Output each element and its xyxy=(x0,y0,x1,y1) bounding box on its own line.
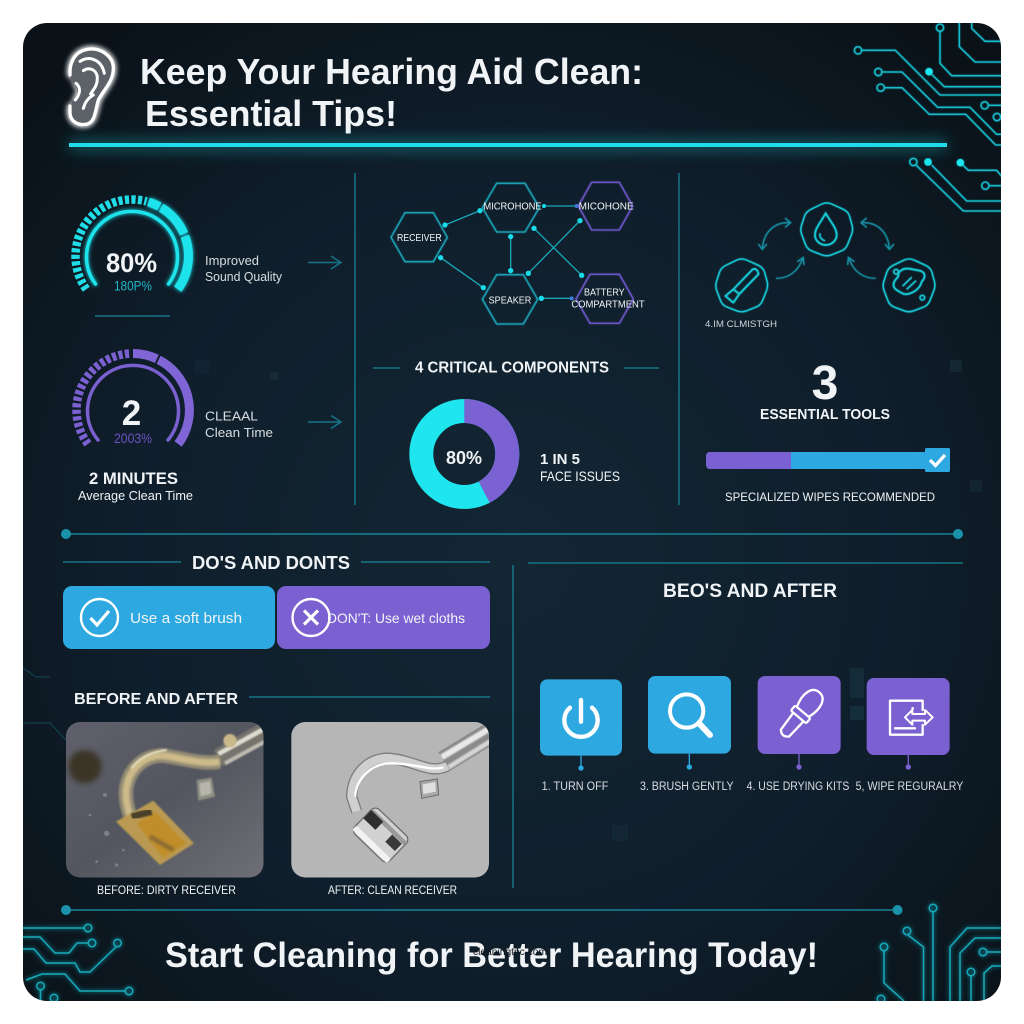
steps row xyxy=(540,676,964,793)
stat: 2 minutes: 2 MINUTES xyxy=(89,469,178,488)
header rule xyxy=(69,139,947,151)
photo: dirty receiver xyxy=(66,722,267,878)
heading: beo's and after: BEO'S AND AFTER xyxy=(663,581,837,602)
label: garbled tool caption: 4.IM CLMISTGH xyxy=(705,319,777,330)
title xyxy=(140,51,643,134)
donut chart: 80% xyxy=(421,399,519,503)
hexagon: speaker: SPEAKER xyxy=(489,296,531,307)
hexagon: microphone purple xyxy=(578,182,634,230)
step 5: wipe regularly xyxy=(856,678,964,793)
gauge: 80% improved sound quality: 180P% xyxy=(114,278,152,294)
hexagon: speaker xyxy=(482,275,538,324)
circuit traces: bottom left xyxy=(23,924,133,1002)
tools cycle diagram xyxy=(716,203,935,312)
hexagon: battery compartment xyxy=(571,274,645,323)
caption: specialized wipes: SPECIALIZED WIPES RECOMMENDED xyxy=(725,490,935,504)
hexagon: microphone purple: MICOHONE xyxy=(579,202,634,213)
stat: 2 minutes: Average Clean Time xyxy=(78,489,193,503)
stat: 3 essential tools xyxy=(760,357,890,423)
icon: check circle xyxy=(81,599,118,636)
stat: 1 in 5 face issues xyxy=(540,451,620,484)
progress bar with check xyxy=(706,448,950,472)
label: improved sound quality: Improved xyxy=(205,254,259,268)
label: clean time: Clean Time xyxy=(205,425,273,440)
gauge: 2 minutes clean time: 2003% xyxy=(114,430,152,446)
captions: photos xyxy=(97,885,457,897)
stat: 2 minutes xyxy=(78,469,193,503)
circuit traces: top right xyxy=(854,20,1003,211)
gauge: 2 minutes clean time: 2 xyxy=(122,394,141,433)
heading: 4 critical components: 4 CRITICAL COMPONENTS xyxy=(415,360,609,377)
hexagon: receiver xyxy=(391,213,447,262)
title: Essential Tips! xyxy=(145,93,397,134)
label: clean time xyxy=(205,408,273,440)
title: Keep Your Hearing Aid Clean: xyxy=(140,51,643,92)
photo: clean receiver xyxy=(291,722,497,878)
donut chart: 80%: 80% xyxy=(446,448,482,468)
bottom divider xyxy=(61,905,902,915)
captions: photos: AFTER: CLEAN RECEIVER xyxy=(328,885,457,897)
step 4: use drying kits xyxy=(747,676,850,793)
icon: glowing ear xyxy=(70,49,113,124)
circuit traces: bottom right xyxy=(877,904,1001,1003)
gauge: 80% improved sound quality xyxy=(76,199,188,294)
icon: wipe cloth xyxy=(883,259,935,312)
hexagon: battery compartment: BATTERY xyxy=(584,287,625,298)
component network diagram xyxy=(391,182,645,324)
hexagon: receiver: RECEIVER xyxy=(397,233,442,244)
step 5: wipe regularly: 5, WIPE REGURALRY xyxy=(856,780,964,793)
gauge: 2 minutes clean time xyxy=(76,354,189,446)
stat: 3 essential tools: ESSENTIAL TOOLS xyxy=(760,406,890,423)
card: don't xyxy=(277,586,490,649)
hexagon: microphone xyxy=(482,183,542,232)
hexagon: battery compartment: COMPARTMENT xyxy=(571,300,645,311)
card: do xyxy=(63,586,275,649)
heading: do's and donts: DO'S AND DONTS xyxy=(192,553,350,573)
heading: before and after: BEFORE AND AFTER xyxy=(74,691,238,708)
step 4: use drying kits: 4. USE DRYING KITS xyxy=(747,780,850,793)
stat: 3 essential tools: 3 xyxy=(812,357,838,410)
call to action: Start Cleaning for Better Hearing Today! xyxy=(165,936,818,975)
icon: brush xyxy=(716,259,768,312)
arrow: clean time xyxy=(308,416,341,428)
step 1: turn off: 1. TURN OFF xyxy=(542,780,608,793)
stat: 1 in 5 face issues: FACE ISSUES xyxy=(540,468,620,484)
stat: 1 in 5 face issues: 1 IN 5 xyxy=(540,451,580,468)
hexagon: microphone: MICROHONE xyxy=(483,202,542,213)
card: don't: DON'T: Use wet cloths xyxy=(327,610,465,626)
step 3: brush gently: 3. BRUSH GENTLY xyxy=(640,780,734,793)
label: improved sound quality xyxy=(205,254,283,284)
label: improved sound quality: Sound Quality xyxy=(205,270,283,284)
arrows: tool cycle xyxy=(758,218,894,278)
icon: water drop xyxy=(801,203,853,256)
section divider xyxy=(61,529,963,539)
label: clean time: CLEAAL xyxy=(205,408,258,424)
icon: cross circle xyxy=(292,599,330,636)
step 3: brush gently xyxy=(640,676,734,793)
card: do: Use a soft brush xyxy=(130,611,242,627)
gauge: 80% improved sound quality: 80% xyxy=(106,248,157,278)
arrow: sound quality xyxy=(308,256,341,269)
captions: photos: BEFORE: DIRTY RECEIVER xyxy=(97,885,236,897)
watermark text: cleaningtnc.com xyxy=(473,946,547,958)
step 1: turn off xyxy=(540,679,622,793)
